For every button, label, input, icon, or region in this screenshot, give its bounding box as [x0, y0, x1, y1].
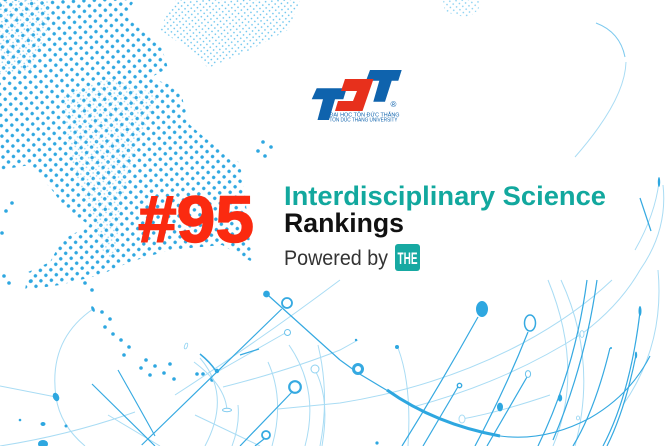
heading: Rankings: Rankings: [284, 208, 404, 238]
network lines: thick sweep: [387, 390, 500, 436]
badge: THE: [395, 244, 420, 271]
logo mark right T: [366, 70, 402, 102]
network lines: dark connectors: [92, 23, 651, 446]
network nodes: [19, 177, 660, 446]
dot map: main landmass: [0, 0, 260, 295]
logo wordmark: ĐẠI HỌC TÔN ĐỨC THẮNG: [330, 110, 400, 118]
rank number: #95: [138, 182, 254, 256]
powered by: Powered by: [284, 247, 388, 270]
logo wordmark english: TON DUC THANG UNIVERSITY: [330, 118, 398, 124]
logo mark red D: [335, 79, 374, 111]
logo mark left T: [312, 88, 347, 120]
badge: THE: THE: [398, 249, 418, 268]
dot map: upper right fine dots: [160, 0, 482, 68]
dot map: scattered dots: [0, 140, 273, 382]
registered mark: ®: [390, 100, 396, 109]
heading: Interdisciplinary Science: Interdisciplinary Science: [284, 181, 606, 211]
logo: TDT university: [312, 70, 402, 124]
